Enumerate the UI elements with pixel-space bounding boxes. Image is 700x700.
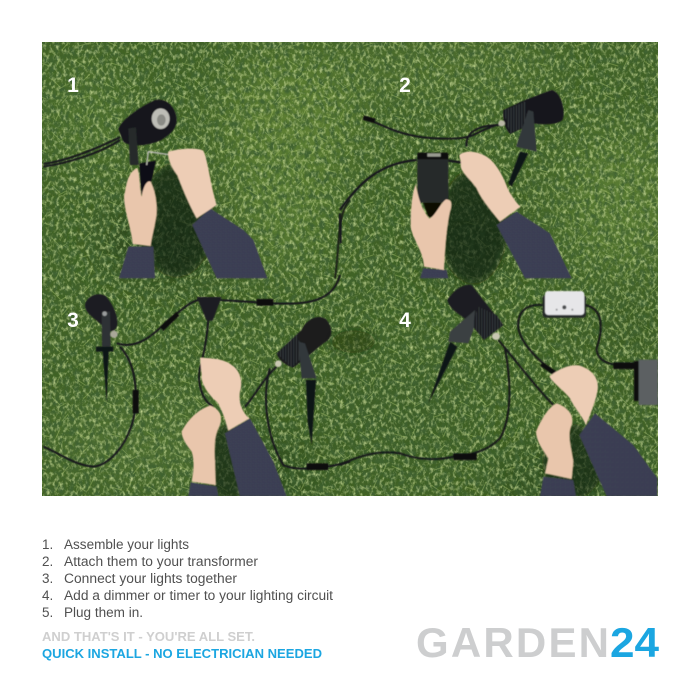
instructions list: Plug them in. xyxy=(64,605,143,620)
instructions list: 3. xyxy=(42,571,53,586)
transformer xyxy=(417,153,448,203)
shadow xyxy=(440,170,507,283)
left sleeve xyxy=(119,247,155,278)
instructions list: 1. xyxy=(42,537,53,552)
left sleeve xyxy=(420,268,448,278)
left hand xyxy=(411,184,451,270)
panel: step 4 photo xyxy=(330,285,658,498)
transformer cable xyxy=(340,160,472,210)
allen key xyxy=(147,152,172,165)
instructions list: Add a dimmer or timer to your lighting circuit xyxy=(64,588,333,603)
upper sleeve xyxy=(225,418,287,496)
instructions list: Assemble your lights xyxy=(64,537,189,552)
instructions list: Connect your lights together xyxy=(64,571,238,586)
instructions list: 5. xyxy=(42,605,53,620)
cables xyxy=(43,275,350,469)
instructions list: Attach them to your transformer xyxy=(64,554,259,569)
panel: step 3 photo xyxy=(43,275,350,498)
upper hand xyxy=(549,365,598,425)
right sleeve xyxy=(497,212,572,278)
T connector xyxy=(197,297,222,321)
shadow under box xyxy=(423,203,442,218)
connectors xyxy=(133,299,328,470)
upper sleeve xyxy=(579,413,657,496)
plug xyxy=(363,118,375,121)
right sleeve xyxy=(192,208,267,278)
icon: right spotlight xyxy=(275,317,331,445)
icon: spotlight xyxy=(498,90,564,187)
panel: grass photo background xyxy=(42,42,680,505)
lower sleeve xyxy=(188,482,218,496)
instructions list xyxy=(42,537,333,620)
panel: step 1 photo xyxy=(43,100,350,278)
icon: spotlight xyxy=(428,285,503,403)
icon: left spotlight xyxy=(85,294,118,403)
shadow xyxy=(203,425,257,498)
upper hand xyxy=(200,358,249,431)
panel: step 2 photo xyxy=(340,90,572,283)
instructions list: 2. xyxy=(42,554,53,569)
left hand xyxy=(124,168,157,246)
step number 2: 2 xyxy=(399,74,411,97)
step number 4: 4 xyxy=(399,309,411,332)
lower hand xyxy=(536,403,573,479)
transformer xyxy=(634,360,658,405)
cables xyxy=(340,305,635,465)
right hand xyxy=(168,149,217,218)
icon: spotlight xyxy=(118,100,177,197)
dimmer box xyxy=(543,291,586,318)
tagline grey: AND THAT'S IT - YOU'RE ALL SET. xyxy=(42,629,255,644)
inline plugs xyxy=(453,362,635,460)
cable xyxy=(363,118,503,147)
step number 1: 1 xyxy=(67,74,79,97)
right hand xyxy=(459,152,521,222)
lower hand xyxy=(182,406,221,485)
instructions list: 4. xyxy=(42,588,53,603)
logo: 24 xyxy=(610,619,660,666)
tagline blue: QUICK INSTALL - NO ELECTRICIAN NEEDED xyxy=(42,646,322,661)
cable xyxy=(43,137,120,167)
step number 3: 3 xyxy=(67,309,79,332)
shadow xyxy=(543,425,603,498)
shadow under hands xyxy=(140,163,213,277)
lower sleeve xyxy=(540,477,576,496)
cable edge xyxy=(335,200,350,278)
logo: GARDEN xyxy=(416,619,609,666)
